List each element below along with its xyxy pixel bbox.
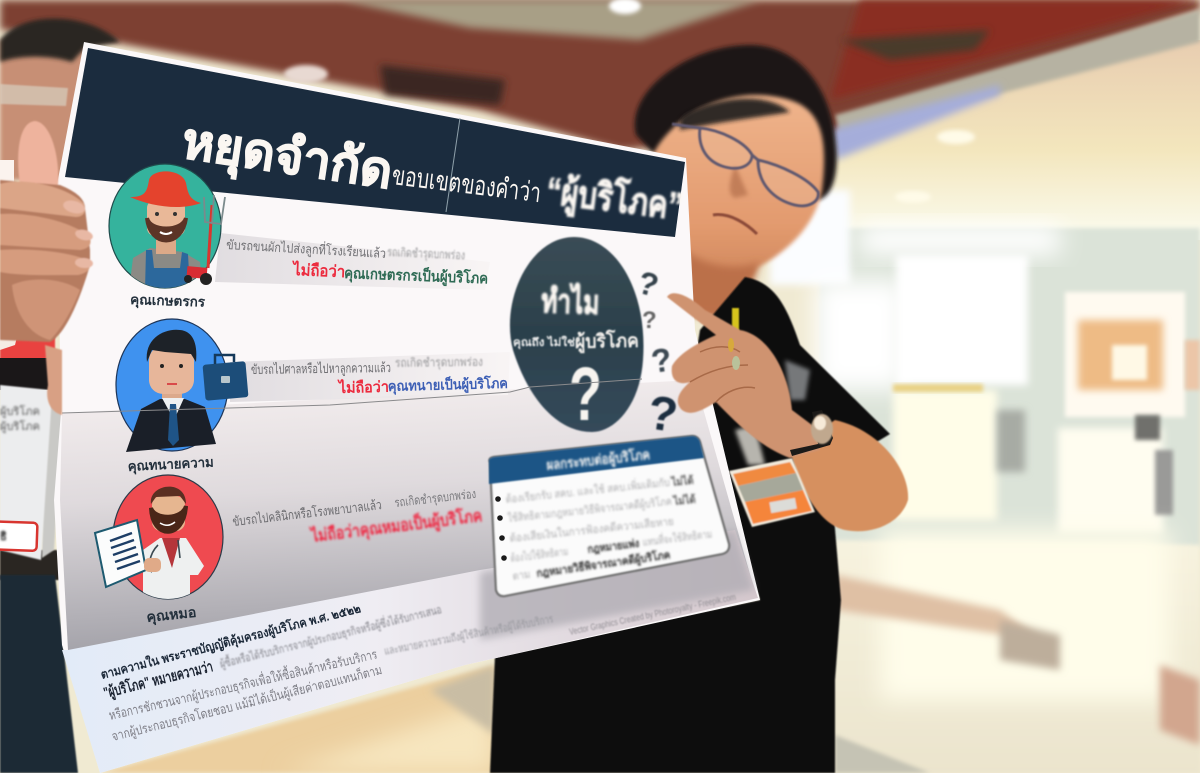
doctor label: คุณหมอ <box>146 604 197 626</box>
row 2 band <box>230 352 510 402</box>
title text <box>178 112 685 231</box>
callout: effects on consumers: กฎหมายวิธีพิจารณาคดีผู้บริโภค <box>535 547 671 581</box>
small paper held by man: ธิ <box>0 530 7 543</box>
callout: effects on consumers: กฎหมายแพ่ง <box>587 538 640 556</box>
row 3 text: รถเกิดชำรุดบกพร่อง <box>394 487 477 511</box>
row 2 text: ขับรถไปศาลหรือไปหาลูกความแล้ว <box>251 360 391 378</box>
row 1 text: รถเกิดชำรุดบกพร่อง <box>387 245 465 263</box>
title text: หยุดจำกัด <box>178 112 396 202</box>
callout: effects on consumers: แทนที่จะใช้สิทธิตาม <box>642 526 713 549</box>
row 3 text: ขับรถไปคลินิกหรือโรงพยาบาลแล้ว <box>232 497 382 529</box>
doctor avatar <box>113 475 223 600</box>
icon: briefcase <box>203 355 248 401</box>
title text: “ผู้บริโภค” <box>544 167 685 231</box>
woman: pointing hand <box>667 293 820 458</box>
definition text: จากผู้ประกอบธุรกิจโดยชอบ แม้มิได้เป็นผู้เสียค่าตอบแทนก็ตาม <box>110 660 384 745</box>
dark question circle: ทำไม <box>541 281 600 321</box>
question marks: ? <box>634 264 662 304</box>
definition text: Vector Graphics Created by Photoroyalty - Freepik.com <box>568 592 737 637</box>
woman: black shirt and body <box>490 277 890 773</box>
title band <box>65 48 685 237</box>
lawyer label: คุณทนายความ <box>127 455 214 475</box>
small paper held by man: ผู้บริโภค <box>0 419 40 433</box>
woman: hair and face <box>635 45 837 315</box>
callout: effects on consumers <box>489 436 729 596</box>
small paper held by man: ผู้บริโภค <box>0 404 40 418</box>
callout: effects on consumers: ต้องเรียกรับ สคบ. และใช้ สคบ.เพิ่มเติมกับ <box>505 474 670 506</box>
poster fold line <box>62 379 642 413</box>
small paper held by man <box>0 385 62 560</box>
poster sheet <box>54 42 760 773</box>
row 1 text: คุณเกษตรกรเป็นผู้บริโภค <box>344 263 488 289</box>
lawyer avatar <box>116 319 228 451</box>
farmer avatar <box>109 164 225 290</box>
definition text: ตามความใน พระราชบัญญัติคุ้มครองผู้บริโภค พ.ศ. ๒๕๒๒ <box>99 600 362 683</box>
callout: effects on consumers: ผลกระทบต่อผู้บริโภค <box>546 445 651 474</box>
row 2 text <box>251 355 508 397</box>
row 3 text <box>232 487 483 548</box>
callout: effects on consumers: ไม่ได้ <box>671 492 696 508</box>
lawyer suit <box>126 398 216 452</box>
dark question circle: คุณถึง ไม่ใช่ <box>513 335 576 350</box>
callout: effects on consumers: ตาม <box>512 569 531 583</box>
definition text: "ผู้บริโภค" หมายความว่า <box>101 656 215 703</box>
callout: effects on consumers: ต้องไปใช้สิทธิตาม <box>510 545 569 565</box>
question marks: ? <box>642 307 657 334</box>
man's hand gripping poster <box>0 121 94 415</box>
wristwatch <box>790 410 833 456</box>
grey lower panel <box>60 380 755 650</box>
row 2 text: รถเกิดชำรุดบกพร่อง <box>395 355 483 371</box>
row 3 text: ไม่ถือว่าคุณหมอเป็นผู้บริโภค <box>308 503 483 548</box>
man behind poster at left <box>0 18 120 773</box>
callout: effects on consumers: ไม่ได้ <box>669 473 694 489</box>
row 1 text <box>226 236 488 289</box>
farmer label: คุณเกษตรกร <box>130 292 206 311</box>
title text: ขอบเขตของคำว่า <box>390 160 543 208</box>
row 2 text: คุณทนายเป็นผู้บริโภค <box>388 374 508 395</box>
woman: glasses <box>672 124 818 206</box>
definition text: และหมายความรวมถึงผู้ใช้สินค้าหรือผู้ได้รับบริการ <box>383 612 554 658</box>
row 2 text: ไม่ถือว่า <box>337 377 389 397</box>
definition text: หรือการชักชวนจากผู้ประกอบธุรกิจเพื่อให้ซื้อสินค้าหรือรับบริการ <box>107 644 379 724</box>
question marks: ? <box>649 340 674 380</box>
row 1 text: ขับรถขนผักไปส่งลูกที่โรงเรียนแล้ว <box>226 236 386 262</box>
dark question circle <box>510 237 644 437</box>
definition text <box>99 592 737 745</box>
id badge <box>729 458 815 527</box>
callout: effects on consumers: ต้องเสียเงินในการฟ้องคดีความเสียหาย <box>509 515 674 545</box>
question marks: ? <box>644 386 681 443</box>
row 1 band <box>215 233 490 290</box>
icon: clipboard <box>95 520 161 587</box>
woman: arm <box>790 420 908 531</box>
definition text: ผู้ซื้อหรือได้รับบริการจากผู้ประกอบธุรกิจหรือผู้ซึ่งได้รับการเสนอ <box>218 601 443 671</box>
dark question circle: ผู้บริโภค <box>575 329 639 354</box>
row 1 text: ไม่ถือว่า <box>291 260 346 281</box>
bottom definition strip <box>62 530 758 773</box>
dark question circle: ? <box>569 352 602 437</box>
callout: effects on consumers: ใช้สิทธิตามกฎหมายวิธีพิจารณาคดีผู้บริโภค <box>507 494 672 525</box>
question marks <box>634 264 681 443</box>
